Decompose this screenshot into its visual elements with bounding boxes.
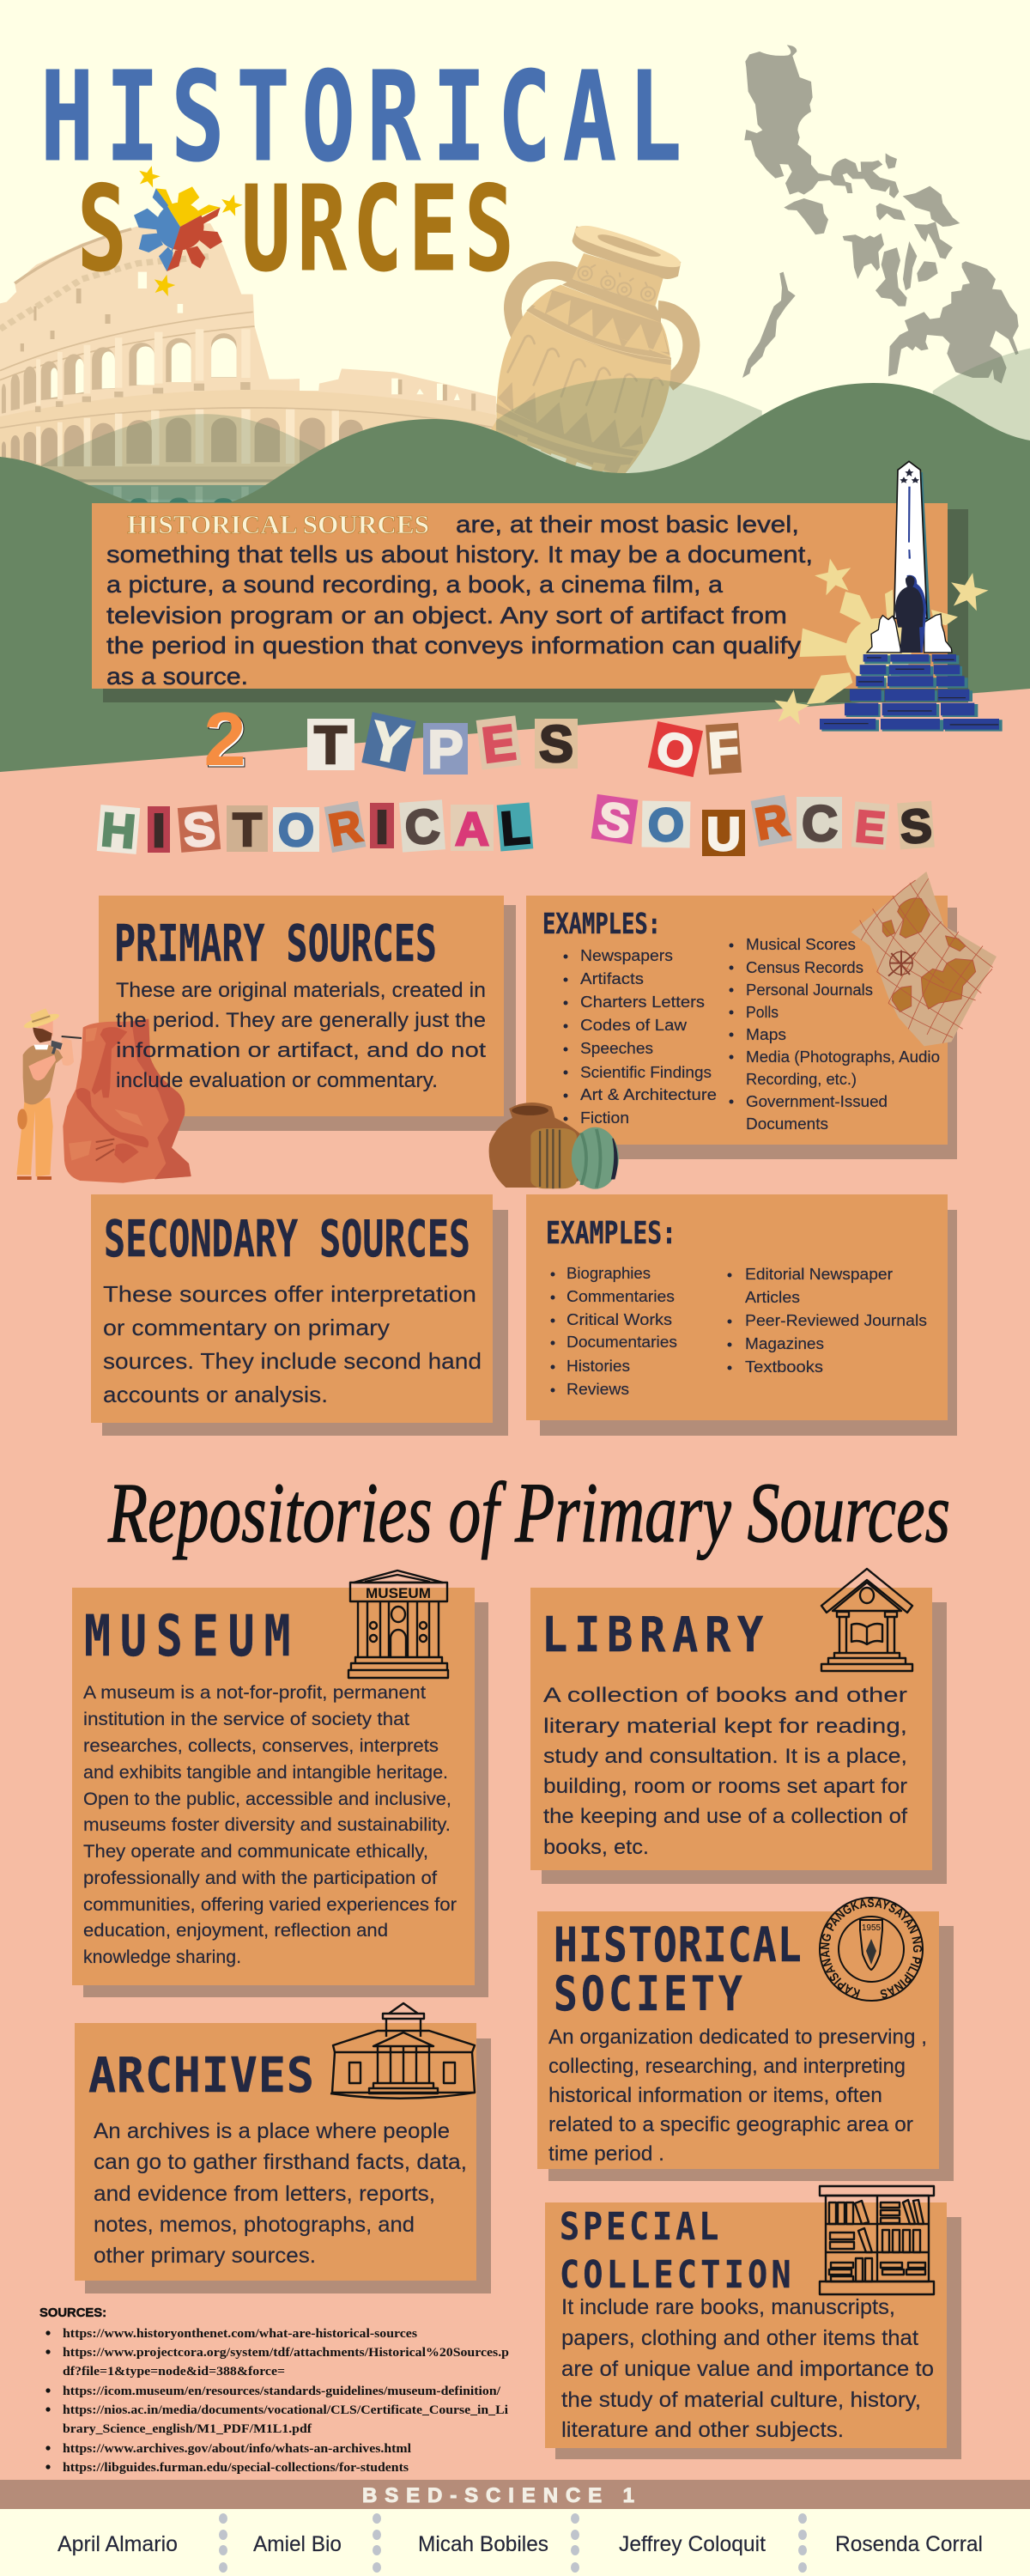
heading: HISTORICAL SOURCES collage: O bbox=[647, 799, 685, 851]
heading: HISTORICAL SOURCES collage bbox=[96, 791, 935, 860]
panel: secondary sources: or commentary on primary bbox=[103, 1315, 390, 1340]
sources list: brary_Science_english/M1_PDF/M1L1.pdf bbox=[63, 2422, 312, 2436]
text: primary sources: PRIMARY SOURCES bbox=[114, 914, 437, 973]
sources list: SOURCES: bbox=[39, 2306, 106, 2320]
footer: authors: Micah Bobiles bbox=[418, 2532, 548, 2556]
sources list bbox=[39, 2306, 509, 2475]
main title: SOURCES: S bbox=[77, 161, 127, 297]
panel: special collection: the study of material culture, history, bbox=[561, 2388, 921, 2412]
panel: museum: institution in the service of society that bbox=[83, 1710, 409, 1729]
panel: secondary source examples: Biographies bbox=[566, 1264, 651, 1282]
panel: definition of historical sources: television program or an object. Any sort of artifact from bbox=[106, 602, 787, 629]
panel: special collection: literature and other subjects. bbox=[561, 2418, 844, 2442]
panel: museum: education, enjoyment, reflection and bbox=[83, 1921, 388, 1941]
text: primary source examples: Recording, etc.) bbox=[746, 1070, 857, 1088]
panel: secondary source examples: Peer-Reviewed Journals bbox=[745, 1311, 927, 1329]
illustration: monument with sun and stars bbox=[772, 461, 1003, 732]
footer band: class name: BSED-SCIENCE 1 bbox=[362, 2484, 634, 2507]
illustration: map of the Philippines bbox=[742, 45, 1019, 384]
panel: special collection: COLLECTION bbox=[560, 2252, 795, 2297]
heading: HISTORICAL SOURCES collage: R bbox=[325, 801, 366, 856]
heading: HISTORICAL SOURCES collage: S bbox=[595, 792, 633, 848]
sources list: https://www.historyonthenet.com/what-are-historical-sources bbox=[63, 2327, 417, 2341]
heading: 2 TYPES OF: E bbox=[479, 714, 518, 774]
text: primary source examples: Charters Letters bbox=[580, 993, 705, 1011]
panel: historical society bbox=[537, 1911, 954, 2181]
panel: historical society: collecting, researching, and interpreting bbox=[548, 2055, 906, 2078]
icon: museum building: MUSEUM bbox=[366, 1585, 431, 1601]
footer: authors bbox=[0, 2509, 1030, 2576]
panel: historical society: related to a specific geographic area or bbox=[548, 2113, 913, 2136]
panel: archives: An archives is a place where people bbox=[94, 2119, 450, 2143]
panel: secondary source examples: Editorial Newspaper bbox=[745, 1265, 893, 1283]
icon: bookshelf bbox=[820, 2186, 934, 2294]
panel: library: A collection of books and other bbox=[543, 1684, 907, 1707]
panel: archives bbox=[75, 2023, 491, 2293]
panel: museum: knowledge sharing. bbox=[83, 1947, 241, 1967]
panel: museum: researches, collects, conserves, interprets bbox=[83, 1736, 439, 1756]
panel: museum: museums foster diversity and sustainability. bbox=[83, 1815, 451, 1835]
panel: secondary source examples: Histories bbox=[566, 1357, 630, 1375]
footer: authors: April Almario bbox=[58, 2532, 178, 2556]
heading: HISTORICAL SOURCES collage: U bbox=[706, 807, 741, 860]
heading: HISTORICAL SOURCES collage: R bbox=[752, 795, 792, 850]
panel: library bbox=[530, 1588, 947, 1884]
panel: special collection: SPECIAL bbox=[560, 2204, 722, 2249]
text: primary source examples: Polls bbox=[746, 1003, 779, 1021]
panel: historical society: historical information or items, often bbox=[548, 2084, 882, 2107]
text: primary source examples: Fiction bbox=[580, 1109, 629, 1127]
panel: secondary source examples: Textbooks bbox=[745, 1358, 823, 1376]
text: primary sources: information or artifact, and do not bbox=[116, 1039, 486, 1062]
panel: definition of historical sources: HISTORICAL SOURCES bbox=[127, 509, 429, 539]
main title: HISTORICAL: HISTORICAL bbox=[40, 46, 694, 189]
text: primary source examples: Media (Photographs, Audio bbox=[746, 1048, 940, 1066]
illustration: ancient vase bbox=[489, 226, 691, 475]
panel: secondary source examples: Critical Works bbox=[566, 1310, 672, 1328]
panel: secondary source examples: Magazines bbox=[745, 1334, 824, 1352]
panel: historical society: time period . bbox=[548, 2142, 664, 2166]
heading: 2 TYPES OF: P bbox=[427, 720, 464, 780]
panel: special collection: papers, clothing and other items that bbox=[561, 2326, 918, 2350]
panel: library: study and consultation. It is a place, bbox=[543, 1745, 907, 1768]
sources list: https://www.archives.gov/about/info/whats-an-archives.html bbox=[63, 2442, 411, 2456]
text: primary source examples: Government-Issued bbox=[746, 1092, 888, 1110]
heading: HISTORICAL SOURCES collage: I bbox=[375, 800, 389, 854]
panel: definition of historical sources: are, at their most basic level, bbox=[456, 511, 799, 538]
sources list: https://nios.ac.in/media/documents/vocational/CLS/Certificate_Course_in_Li bbox=[63, 2403, 508, 2417]
illustration: archaeologist and fossil rock bbox=[16, 1008, 191, 1183]
heading: HISTORICAL SOURCES collage: T bbox=[233, 803, 262, 856]
sources list: https://libguides.furman.edu/special-collections/for-students bbox=[63, 2461, 409, 2475]
icon: library building bbox=[821, 1569, 912, 1671]
panel: library: literary material kept for reading, bbox=[543, 1715, 907, 1738]
text: primary source examples: Musical Scores bbox=[746, 935, 856, 953]
heading: 2 TYPES OF: T bbox=[314, 716, 347, 775]
icon: historical society seal: KAPISANANG PANGKASAYSAYAN NG PILIPINAS bbox=[821, 1899, 922, 1998]
panel: secondary source examples: Reviews bbox=[566, 1380, 629, 1398]
panel: secondary source examples bbox=[526, 1194, 957, 1436]
icon: Philippine sun and stars bbox=[134, 163, 245, 297]
heading: HISTORICAL SOURCES collage: E bbox=[853, 802, 888, 854]
panel: museum: professionally and with the participation of bbox=[83, 1868, 437, 1888]
text: primary sources: include evaluation or commentary. bbox=[116, 1069, 438, 1092]
panel: museum: communities, offering varied experiences for bbox=[83, 1895, 457, 1915]
panel: secondary sources: accounts or analysis. bbox=[103, 1382, 328, 1407]
panel: historical society: SOCIETY bbox=[554, 1966, 746, 2021]
panel: special collection: It include rare books, manuscripts, bbox=[561, 2295, 895, 2319]
icon: archives building bbox=[330, 2003, 475, 2099]
green foreground hills bbox=[0, 383, 1030, 773]
footer: authors: Jeffrey Coloquit bbox=[619, 2532, 766, 2556]
sources list: https://icom.museum/en/resources/standards-guidelines/museum-definition/ bbox=[63, 2385, 501, 2398]
heading: 2 TYPES OF bbox=[204, 696, 742, 783]
panel: definition of historical sources: something that tells us about history. It may be a document, bbox=[106, 541, 813, 568]
heading: HISTORICAL SOURCES collage: C bbox=[802, 796, 838, 852]
background hills bbox=[39, 349, 1030, 500]
heading: 2 TYPES OF: 2 bbox=[204, 696, 245, 781]
panel: special collection: are of unique value and importance to bbox=[561, 2357, 934, 2381]
text: primary source examples: Census Records bbox=[746, 958, 863, 976]
text: primary source examples: Speeches bbox=[580, 1039, 653, 1057]
panel: archives: notes, memos, photographs, and bbox=[94, 2213, 415, 2237]
panel: secondary source examples: Documentaries bbox=[566, 1333, 677, 1351]
heading: 2 TYPES OF: 2 bbox=[206, 698, 247, 783]
sources list: https://www.projectcora.org/system/tdf/attachments/Historical%20Sources.p bbox=[63, 2346, 509, 2360]
panel: historical society: HISTORICAL bbox=[554, 1917, 803, 1972]
text: primary source examples: Maps bbox=[746, 1025, 786, 1043]
panel: special collection bbox=[545, 2202, 961, 2459]
panel: archives: can go to gather firsthand facts, data, bbox=[94, 2150, 467, 2174]
heading: HISTORICAL SOURCES collage: H bbox=[99, 802, 137, 859]
heading: HISTORICAL SOURCES collage: S bbox=[181, 802, 217, 857]
text: primary source examples: Newspapers bbox=[580, 946, 673, 964]
icon: museum building bbox=[348, 1571, 448, 1678]
pink lower background bbox=[0, 689, 1030, 2576]
panel: primary source examples box bbox=[526, 896, 957, 1159]
panel: secondary sources bbox=[91, 1194, 508, 1436]
text: primary source examples: Artifacts bbox=[580, 969, 644, 987]
panel: definition of historical sources: as a source. bbox=[106, 663, 248, 690]
heading: HISTORICAL SOURCES collage: C bbox=[403, 799, 441, 854]
panel: secondary source examples: EXAMPLES: bbox=[546, 1216, 676, 1251]
panel: definition of historical sources: a picture, a sound recording, a book, a cinema film, a bbox=[106, 571, 723, 598]
panel: secondary sources: sources. They include second hand bbox=[103, 1348, 482, 1374]
panel: museum bbox=[72, 1588, 488, 1997]
panel: secondary sources: These sources offer interpretation bbox=[103, 1281, 476, 1307]
panel: museum: They operate and communicate ethically, bbox=[83, 1842, 428, 1862]
main title: SOURCES: URCES bbox=[241, 161, 520, 297]
text: primary source examples: Scientific Findings bbox=[580, 1063, 712, 1081]
panel: secondary source examples: Articles bbox=[745, 1288, 800, 1306]
panel: library: building, room or rooms set apart for bbox=[543, 1775, 907, 1798]
panel: museum: A museum is a not-for-profit, permanent bbox=[83, 1683, 426, 1703]
heading: HISTORICAL SOURCES collage: A bbox=[455, 802, 489, 855]
heading: HISTORICAL SOURCES collage: L bbox=[499, 800, 532, 855]
panel: library: the keeping and use of a collection of bbox=[543, 1805, 907, 1828]
panel: secondary sources: SECONDARY SOURCES bbox=[104, 1209, 470, 1268]
text: primary sources: the period. They are generally just the bbox=[116, 1009, 486, 1032]
panel: museum: and exhibits tangible and intangible heritage. bbox=[83, 1763, 448, 1783]
icon: historical society seal: 1955 bbox=[862, 1923, 882, 1933]
heading: 2 TYPES OF: O bbox=[652, 721, 698, 780]
panel: library: books, etc. bbox=[543, 1836, 649, 1859]
panel: archives: ARCHIVES bbox=[88, 2047, 315, 2103]
text: primary source examples: Art & Architecture bbox=[580, 1085, 717, 1103]
panel: historical society: An organization dedicated to preserving , bbox=[548, 2026, 927, 2049]
panel: definition of historical sources: the period in question that conveys information can qualify bbox=[106, 632, 801, 659]
panel: museum: MUSEUM bbox=[84, 1603, 300, 1669]
main title: SOURCES bbox=[77, 161, 520, 297]
heading: HISTORICAL SOURCES collage: O bbox=[278, 805, 314, 856]
heading: HISTORICAL SOURCES collage: I bbox=[152, 804, 166, 857]
footer: authors: Rosenda Corral bbox=[835, 2532, 983, 2556]
text: primary source examples: Personal Journals bbox=[746, 981, 873, 999]
panel: archives: other primary sources. bbox=[94, 2244, 316, 2268]
panel: museum: Open to the public, accessible and inclusive, bbox=[83, 1789, 451, 1809]
illustration: treasure map bbox=[851, 872, 997, 1046]
text: primary source examples: EXAMPLES: bbox=[542, 907, 661, 940]
text: primary source examples bbox=[542, 907, 940, 1133]
illustration: colosseum bbox=[0, 223, 496, 513]
heading: HISTORICAL SOURCES collage: S bbox=[899, 799, 934, 854]
text: primary sources: These are original materials, created in bbox=[116, 979, 486, 1002]
heading: 2 TYPES OF: S bbox=[539, 715, 573, 773]
text: primary source examples: Codes of Law bbox=[580, 1016, 688, 1034]
sources list: df?file=1&type=node&id=388&force= bbox=[63, 2365, 285, 2379]
text: primary sources bbox=[114, 914, 486, 1092]
footer: authors: Amiel Bio bbox=[253, 2532, 342, 2556]
panel: archives: and evidence from letters, reports, bbox=[94, 2182, 435, 2206]
heading: 2 TYPES OF: F bbox=[706, 721, 741, 779]
illustration: clay pots bbox=[489, 1103, 619, 1189]
panel: library: LIBRARY bbox=[542, 1607, 770, 1663]
text: primary source examples: Documents bbox=[746, 1115, 828, 1133]
panel: primary sources box bbox=[99, 896, 516, 1131]
footer band: class name bbox=[0, 2480, 1030, 2509]
heading: 2 TYPES OF: Y bbox=[365, 710, 412, 776]
panel: definition of historical sources bbox=[92, 503, 968, 702]
panel: secondary source examples: Commentaries bbox=[566, 1287, 675, 1305]
